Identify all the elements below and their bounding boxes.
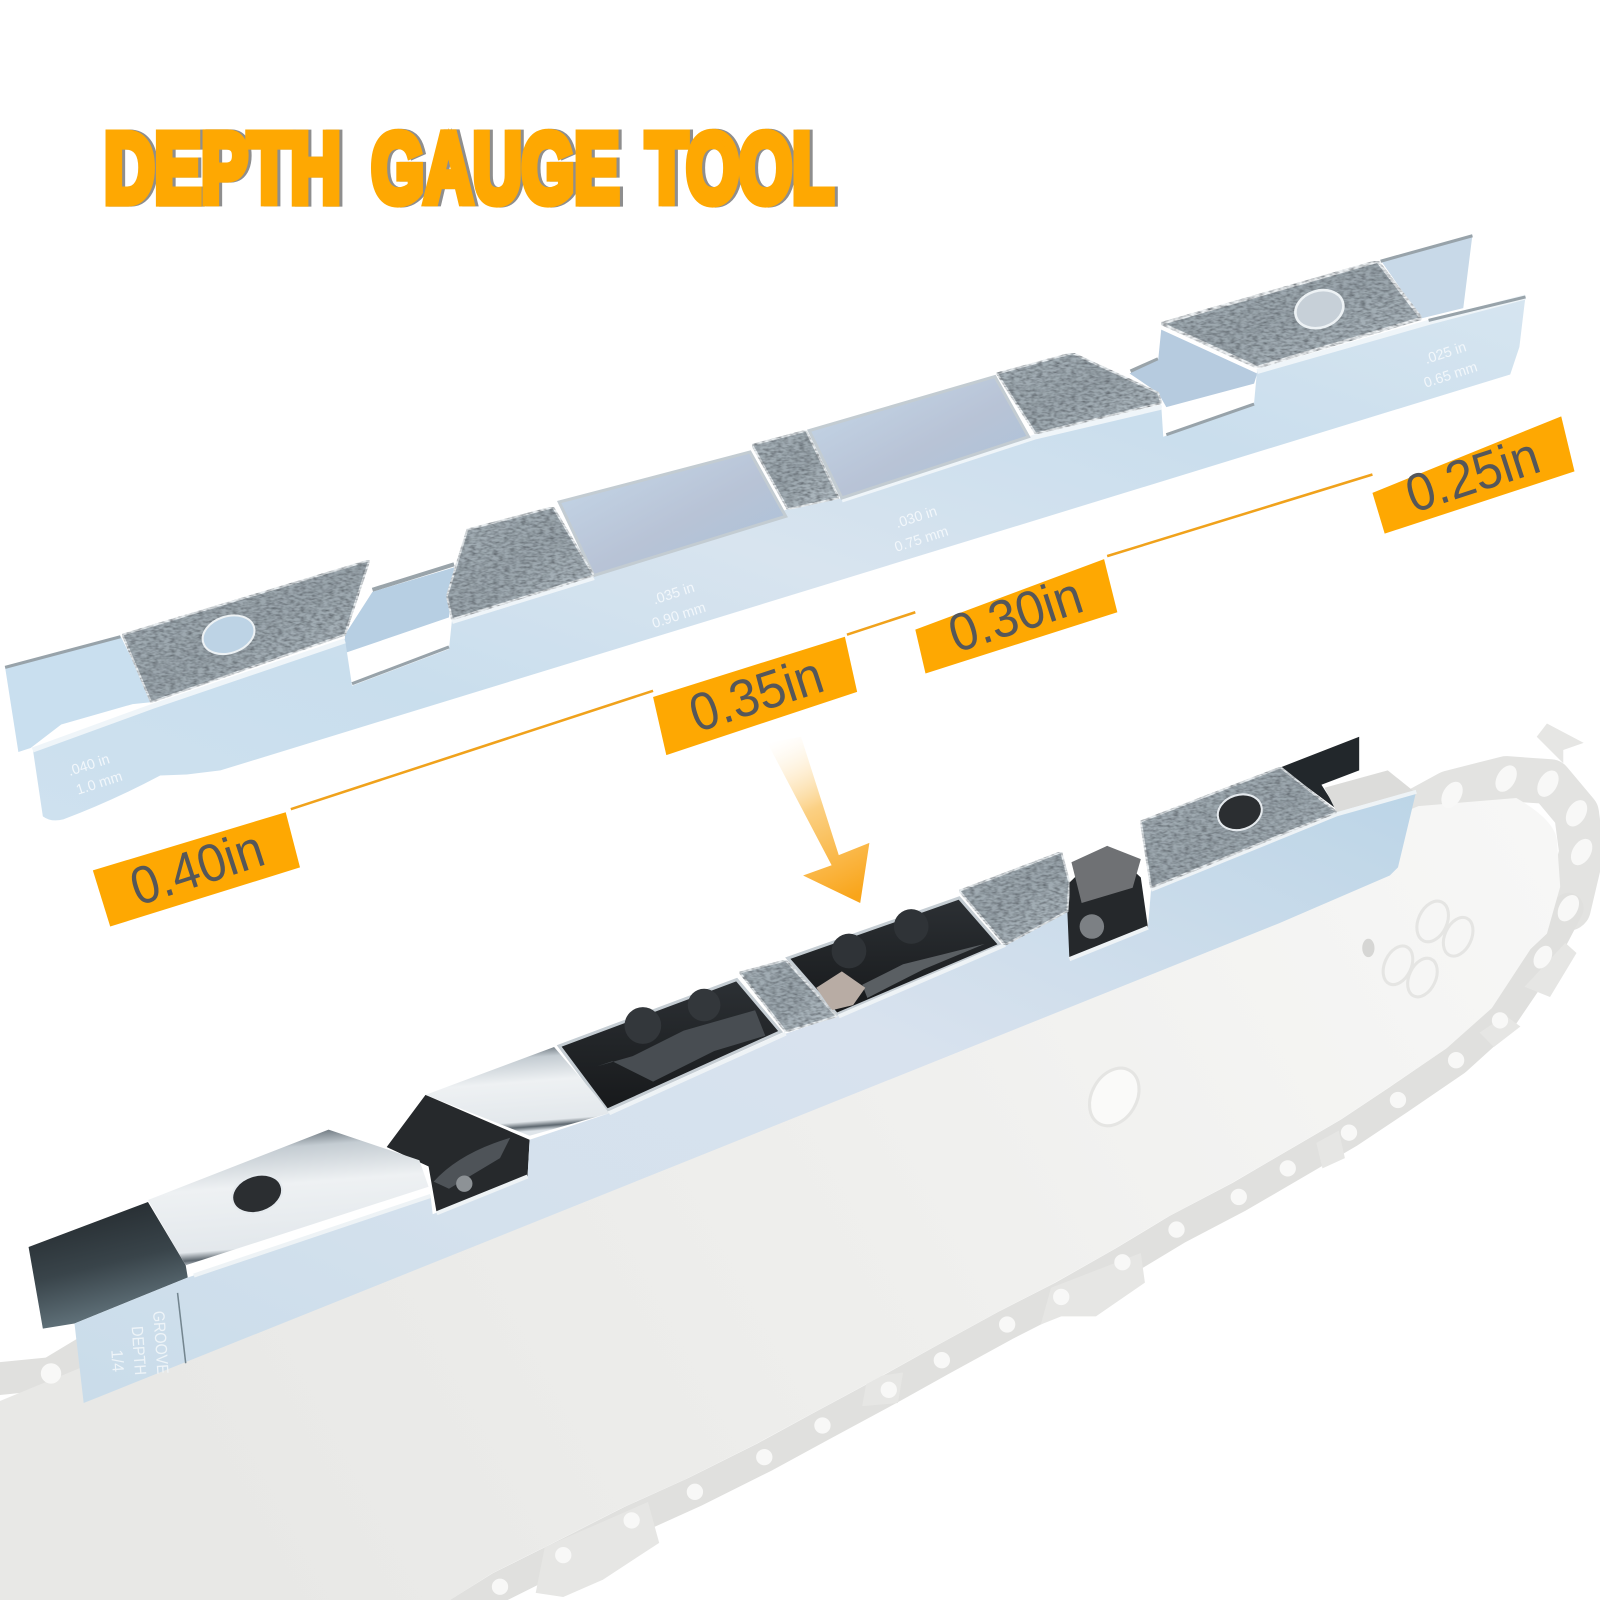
embossed marking: groove depth: GROOVE: [149, 1310, 171, 1375]
tag: 0.30in: [915, 559, 1117, 673]
notch one with chain: [387, 1095, 530, 1213]
title: depth gauge tool: DEPTH: [104, 113, 341, 223]
embossed marking 0.40: 1.0 mm: [74, 769, 125, 799]
window one: [559, 452, 786, 576]
top depth gauge tool: [5, 235, 1526, 820]
steel saddle left with hole: [148, 1130, 429, 1265]
steel saddle left with hole: [122, 560, 369, 702]
gray inner wall behind notch one: [387, 1130, 434, 1166]
front wall: [74, 791, 1416, 1403]
embossed marking 0.30: .030 in: [894, 504, 939, 532]
end panel seam: [178, 1293, 186, 1363]
steel tab three: [752, 431, 839, 509]
title: depth gauge tool: TOOL: [646, 113, 834, 223]
embossed marking 0.25: [1415, 338, 1480, 392]
embossed marking: groove depth: DEPTH: [128, 1326, 149, 1376]
notch right with chain: [1066, 846, 1148, 961]
embossed marking 0.35: 0.90 mm: [650, 600, 708, 632]
window two: [809, 377, 1029, 498]
chainsaw guide bar and chain (faded): [0, 723, 1597, 1600]
embossed marking 0.35: .035 in: [651, 580, 697, 608]
tag: 0.25in: [1372, 416, 1574, 534]
embossed marking 0.40: [66, 749, 125, 799]
dark strip right: [1281, 737, 1359, 809]
title: depth gauge tool: GAUGE: [371, 113, 619, 223]
thin back rim: [372, 359, 1158, 590]
window four with chain: [788, 898, 1000, 1014]
inner blue channel left: [345, 567, 454, 653]
chain link rivets: [41, 762, 1597, 1595]
embossed marking: groove depth: 1/4: [107, 1349, 127, 1373]
chain cutter peeking out right: [1324, 770, 1413, 812]
tag: 0.25in: 0.25in: [1399, 426, 1547, 524]
steel saddle right with hole: [1161, 261, 1421, 367]
tag: 0.35in: [653, 637, 857, 755]
steel tab two: [447, 507, 594, 619]
embossed marking 0.30: 0.75 mm: [893, 523, 950, 556]
bottom depth gauge tool mounted on bar: [29, 737, 1416, 1403]
steel saddle right with hole: [1141, 767, 1337, 888]
back wall left: [5, 636, 153, 752]
embossed marking 0.30: [886, 502, 950, 556]
embossed marking 0.25: .025 in: [1423, 339, 1468, 368]
steel tab four: [997, 353, 1161, 434]
dark strip left: [29, 1202, 188, 1329]
saw chain band: [0, 779, 1582, 1600]
inner blue channel right: [1130, 330, 1257, 407]
tag: 0.40in: 0.40in: [123, 819, 271, 917]
arrow pointing to gauge on bar: [767, 737, 869, 903]
window three with chain: [559, 980, 781, 1110]
back wall right: [1381, 235, 1472, 318]
embossed marking: groove depth: [107, 1310, 171, 1376]
embossed marking 0.35: [643, 578, 708, 632]
front wall top edge highlight: [33, 297, 1526, 750]
tag: 0.30in: 0.30in: [941, 566, 1090, 664]
cutter tooth: [816, 971, 865, 1010]
tag: 0.35in: 0.35in: [682, 646, 831, 744]
steel tab two: [426, 1047, 609, 1136]
steel tab four: [959, 852, 1069, 945]
bar mounting holes: [1080, 896, 1479, 1135]
tag: 0.40in: [93, 812, 300, 927]
front wall: [33, 296, 1526, 820]
title: depth gauge tool: DEPTH: [107, 113, 344, 223]
guide bar body: [0, 798, 1560, 1600]
front wall bright top edge: [194, 792, 1416, 1276]
title: depth gauge tool: TOOL: [649, 113, 837, 223]
embossed marking 0.25: 0.65 mm: [1422, 359, 1480, 392]
title: depth gauge tool: GAUGE: [374, 113, 622, 223]
embossed marking 0.40: .040 in: [66, 751, 112, 780]
back and front rims: [5, 236, 1526, 684]
title: depth gauge tool: [104, 113, 837, 223]
chain cutter teeth: [536, 723, 1584, 1597]
steel tab three: [740, 960, 837, 1032]
orange depth scale line: [291, 474, 1372, 809]
